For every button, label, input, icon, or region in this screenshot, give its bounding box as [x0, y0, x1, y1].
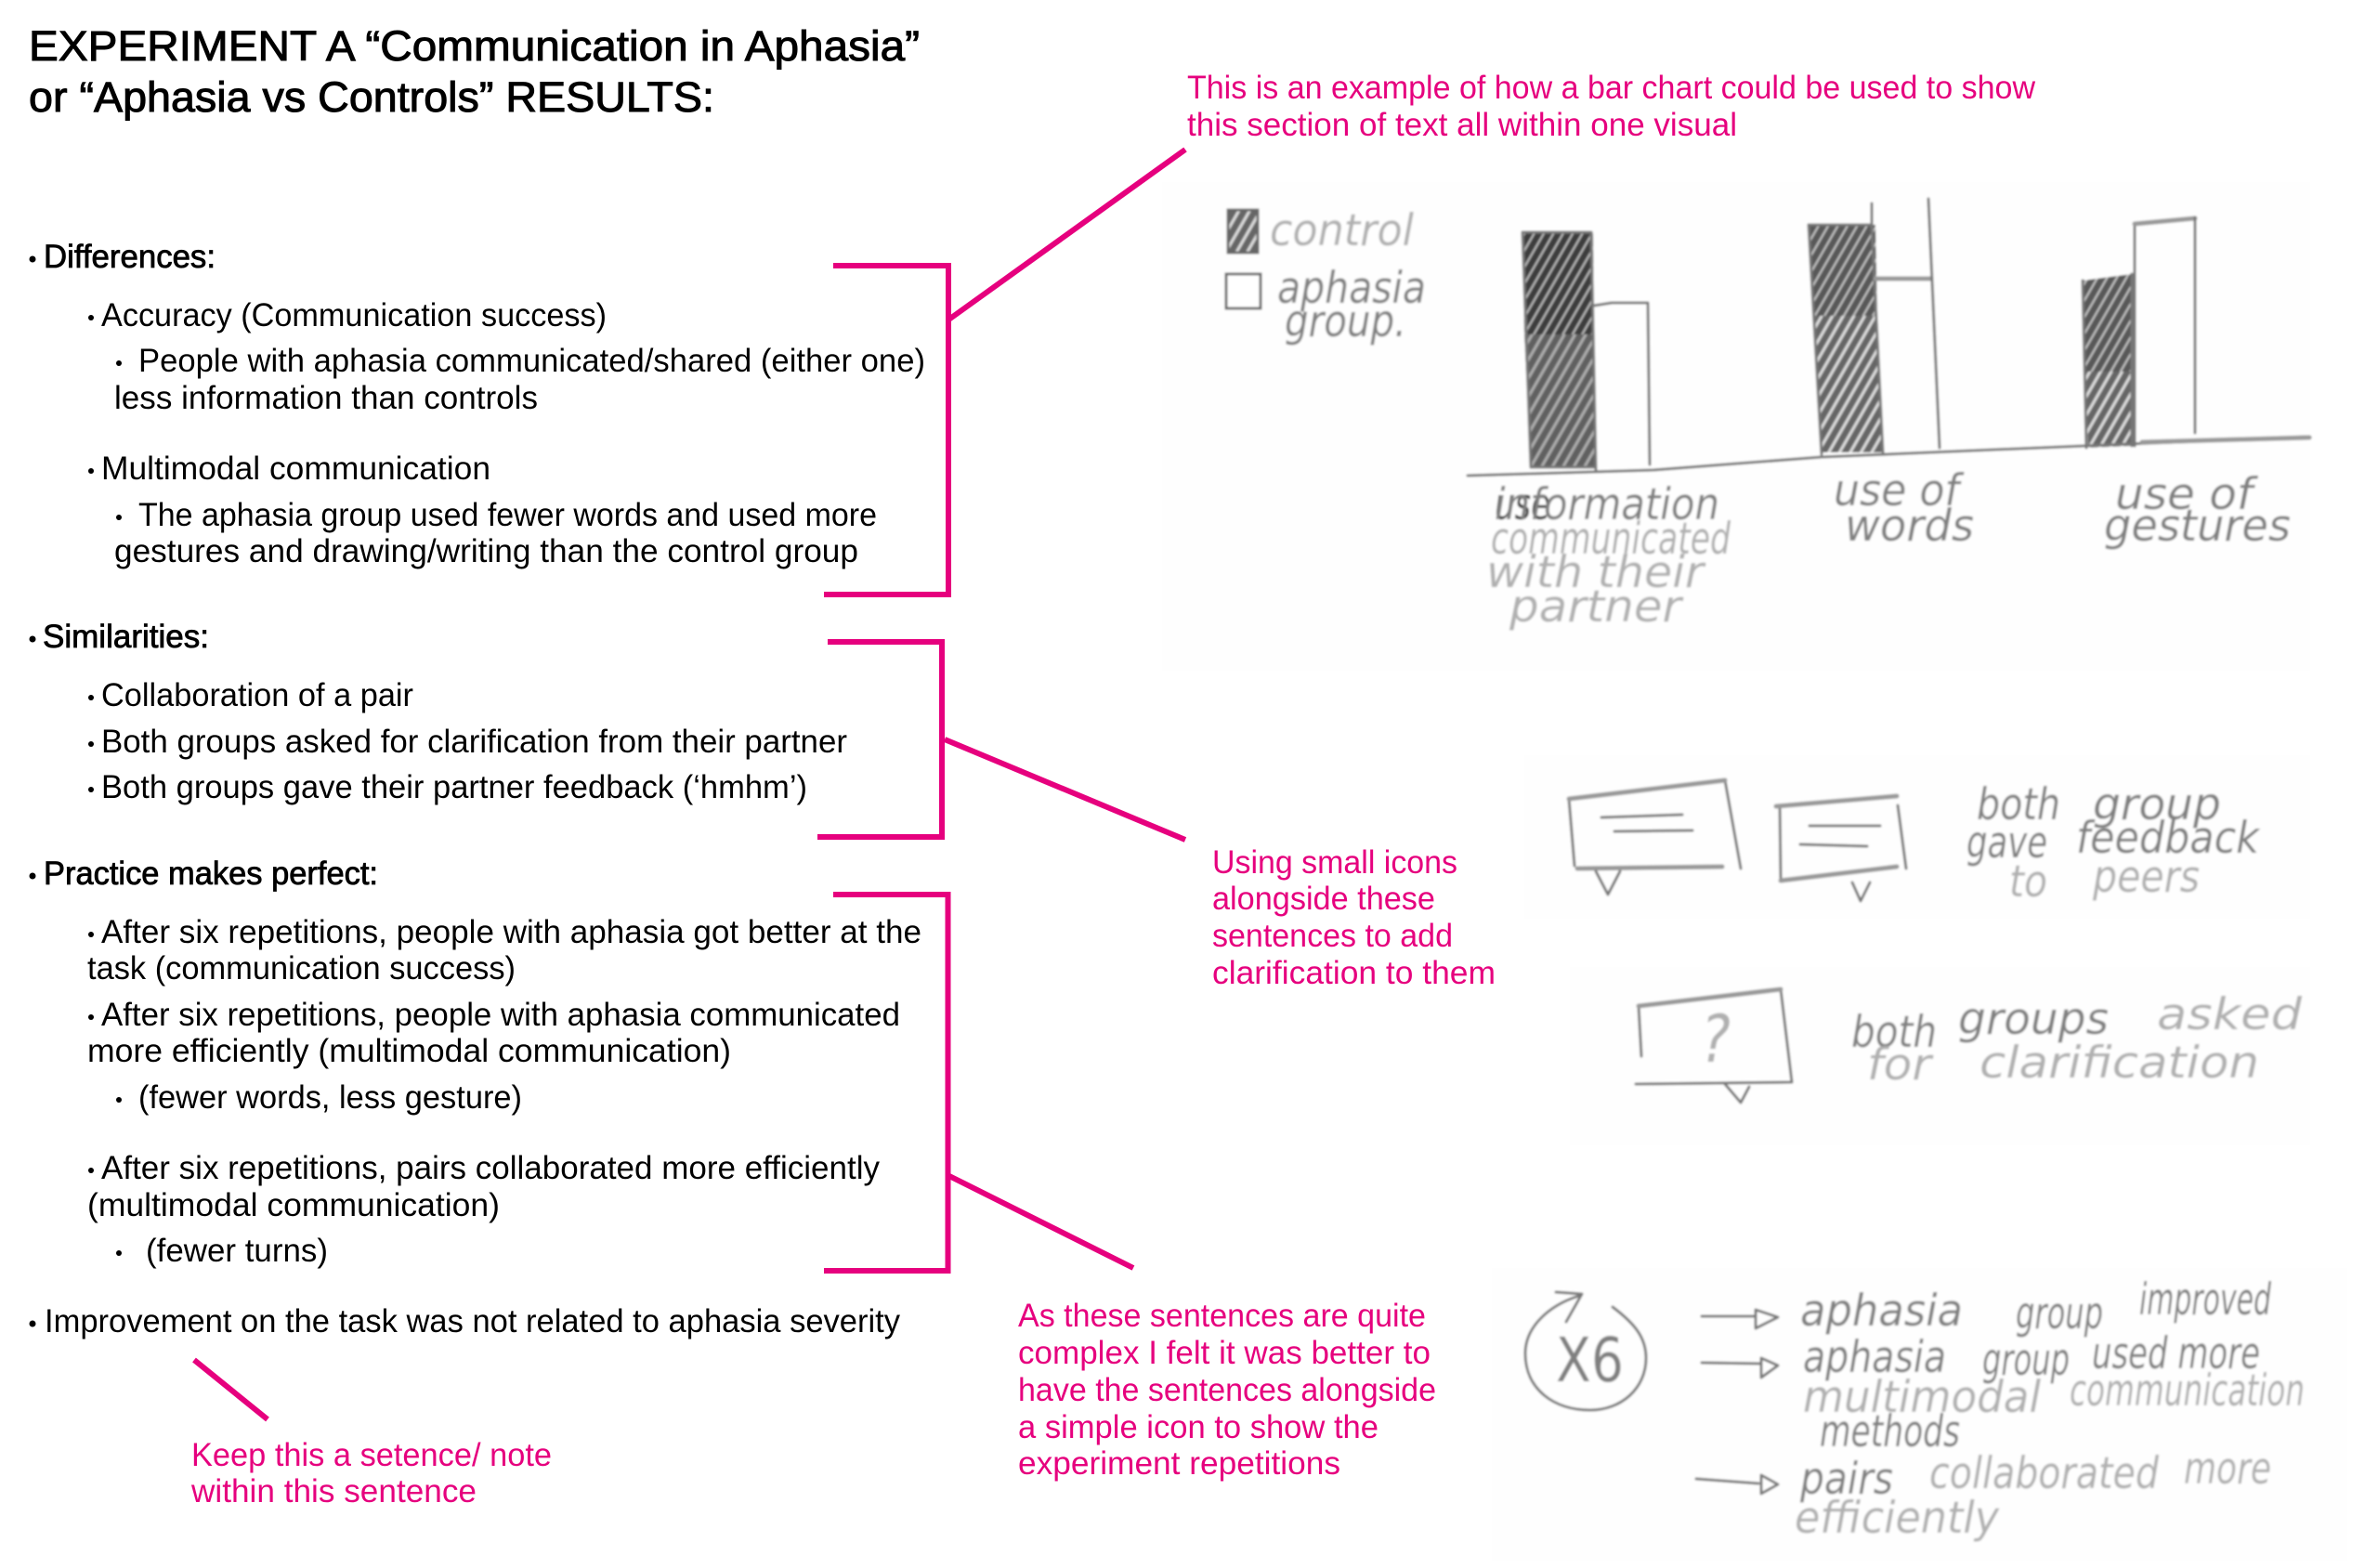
legend: aphasia — [1277, 263, 1426, 314]
text block: practice makes perfect: After six repetitions, people with aphasia got better at the — [101, 914, 921, 950]
text block: practice makes perfect: (fewer words, less gesture) — [138, 1079, 522, 1116]
handwritten note: feedback: to — [2009, 856, 2047, 908]
handwritten note: feedback: gave — [1966, 817, 2047, 869]
callout: keep as note: within this sentence — [190, 1473, 477, 1509]
handwritten note: clarification: groups — [1958, 994, 2109, 1045]
arrow: improvement to sentence note — [194, 1360, 268, 1419]
text block: differences: The aphasia group used fewer words and used more — [138, 497, 877, 533]
axis labels: use of — [2115, 469, 2259, 520]
callout: small icons: alongside these — [1212, 881, 1435, 917]
text block: differences — [30, 239, 925, 569]
title: EXPERIMENT A “Communication in Aphasia” — [29, 22, 920, 70]
handwritten note: feedback — [1966, 779, 2261, 908]
bars: use of gestures — [2083, 217, 2195, 448]
text block: differences: less information than controls — [114, 380, 538, 416]
panel: repetitions sketch — [1491, 1267, 2348, 1561]
handwritten notes: multimodal — [1803, 1372, 2041, 1423]
callout: bar chart — [1187, 70, 2036, 143]
title — [29, 22, 920, 121]
text block: differences: Accuracy (Communication success) — [101, 297, 607, 333]
callout: repetitions icon: experiment repetitions — [1018, 1445, 1340, 1482]
text block: similarities: Both groups gave their partner feedback (‘hmhm’) — [101, 769, 807, 805]
axis — [1468, 437, 2309, 476]
axis labels: information — [1495, 479, 1719, 530]
handwritten notes: efficiently — [1795, 1493, 2000, 1544]
callout: keep as note: Keep this a setence/ note — [191, 1437, 552, 1473]
bracket: differences — [824, 266, 948, 595]
handwritten notes: group — [1982, 1335, 2070, 1386]
callout: repetitions icon — [1018, 1298, 1436, 1482]
axis labels: use of — [1834, 465, 1965, 516]
axis labels: with their — [1486, 547, 1706, 598]
panel: bar chart sketch — [1161, 181, 2311, 672]
callout: small icons: Using small icons — [1212, 844, 1457, 881]
icon: six repetitions loop — [1525, 1292, 1646, 1410]
text block: practice makes perfect: After six repetitions, pairs collaborated more efficiently — [101, 1150, 880, 1186]
handwritten notes: aphasia — [1800, 1286, 1963, 1337]
icon: speech bubble two — [1776, 796, 1906, 901]
handwritten notes: methods — [1820, 1406, 1960, 1457]
arrow: practice to repetitions note — [947, 1175, 1133, 1268]
callout: repetitions icon: complex I felt it was better to — [1018, 1335, 1431, 1371]
handwritten notes: used more — [2092, 1328, 2260, 1379]
legend — [1226, 205, 1426, 347]
axis labels: gestures — [2104, 501, 2291, 552]
text block: practice makes perfect: Practice makes perfect: — [44, 856, 378, 892]
text block: improvement note: Improvement on the task was not related to aphasia severity — [45, 1303, 900, 1339]
icon: question bubble — [1636, 989, 1792, 1103]
icon: question bubble: ? — [1701, 1001, 1731, 1078]
handwritten notes: improved — [2139, 1274, 2272, 1326]
axis labels — [1486, 465, 2291, 633]
text block: practice makes perfect: more efficiently (multimodal communication) — [87, 1033, 731, 1069]
text block: similarities: Collaboration of a pair — [101, 677, 413, 713]
text block: similarities — [30, 619, 847, 805]
text block: practice makes perfect — [30, 856, 921, 1269]
text block: differences: People with aphasia communicated/shared (either one) — [138, 343, 925, 379]
bars: use of words — [1809, 199, 1940, 454]
handwritten note: clarification: asked — [2157, 989, 2303, 1040]
callout: keep as note — [190, 1437, 552, 1509]
bars: information communicated — [1522, 232, 1650, 470]
bracket: similarities — [817, 642, 942, 837]
text block: practice makes perfect: task (communication success) — [87, 950, 516, 987]
handwritten note: feedback: peers — [2092, 852, 2200, 903]
handwritten notes: collaborated — [1929, 1448, 2160, 1499]
handwritten note: clarification: both — [1851, 1007, 1937, 1058]
callout: small icons — [1212, 844, 1496, 991]
callout: repetitions icon: As these sentences are quite — [1018, 1298, 1426, 1334]
title: or “Aphasia vs Controls” RESULTS: — [29, 73, 714, 121]
handwritten note: feedback: both — [1977, 779, 2060, 830]
text block: practice makes perfect: After six repetitions, people with aphasia communicated — [101, 997, 900, 1033]
panel: feedback speech bubbles sketch — [1523, 754, 2311, 920]
handwritten note: feedback: group — [2093, 779, 2221, 830]
handwritten notes: aphasia — [1803, 1332, 1946, 1383]
text block: differences: Multimodal communication — [101, 451, 490, 487]
callout: small icons: sentences to add — [1212, 918, 1453, 954]
text block: practice makes perfect: (fewer turns) — [146, 1233, 328, 1269]
axis labels: words — [1845, 501, 1974, 552]
callout: bar chart: This is an example of how a bar chart could be used to show — [1187, 70, 2036, 106]
callout: repetitions icon: a simple icon to show the — [1018, 1409, 1378, 1445]
handwritten notes: group — [2016, 1288, 2103, 1339]
handwritten note: clarification: clarification — [1980, 1038, 2259, 1089]
handwritten note: feedback: feedback — [2076, 813, 2261, 864]
text block: practice makes perfect: (multimodal communication) — [87, 1187, 500, 1223]
handwritten note: clarification: for — [1867, 1039, 1934, 1091]
legend: group. — [1285, 296, 1406, 347]
text block: differences: Differences: — [44, 239, 216, 275]
arrow: similarities to icons note — [945, 739, 1185, 840]
arrows — [1696, 1310, 1778, 1494]
panel: clarification speech bubble sketch — [1569, 966, 2311, 1146]
icon: six repetitions loop: X6 — [1556, 1325, 1624, 1396]
text block: similarities: Both groups asked for clarification from their partner — [101, 724, 847, 760]
callout: repetitions icon: have the sentences alongside — [1018, 1372, 1436, 1408]
axis labels: use — [1495, 479, 1550, 530]
text block: differences: gestures and drawing/writing than the control group — [114, 533, 858, 569]
text block: similarities: Similarities: — [43, 619, 209, 655]
axis labels: communicated — [1491, 514, 1731, 565]
axis labels: partner — [1509, 581, 1684, 633]
legend: control — [1270, 205, 1414, 256]
handwritten notes: pairs — [1799, 1454, 1893, 1505]
callout: bar chart: this section of text all within one visual — [1187, 107, 1737, 143]
icon: speech bubble one — [1569, 780, 1741, 895]
handwritten note: clarification — [1851, 989, 2303, 1091]
callout: small icons: clarification to them — [1212, 955, 1496, 991]
arrow: differences to bar chart — [947, 150, 1185, 320]
handwritten notes — [1795, 1274, 2305, 1544]
handwritten notes: more — [2184, 1444, 2271, 1495]
bracket: practice — [824, 895, 947, 1271]
